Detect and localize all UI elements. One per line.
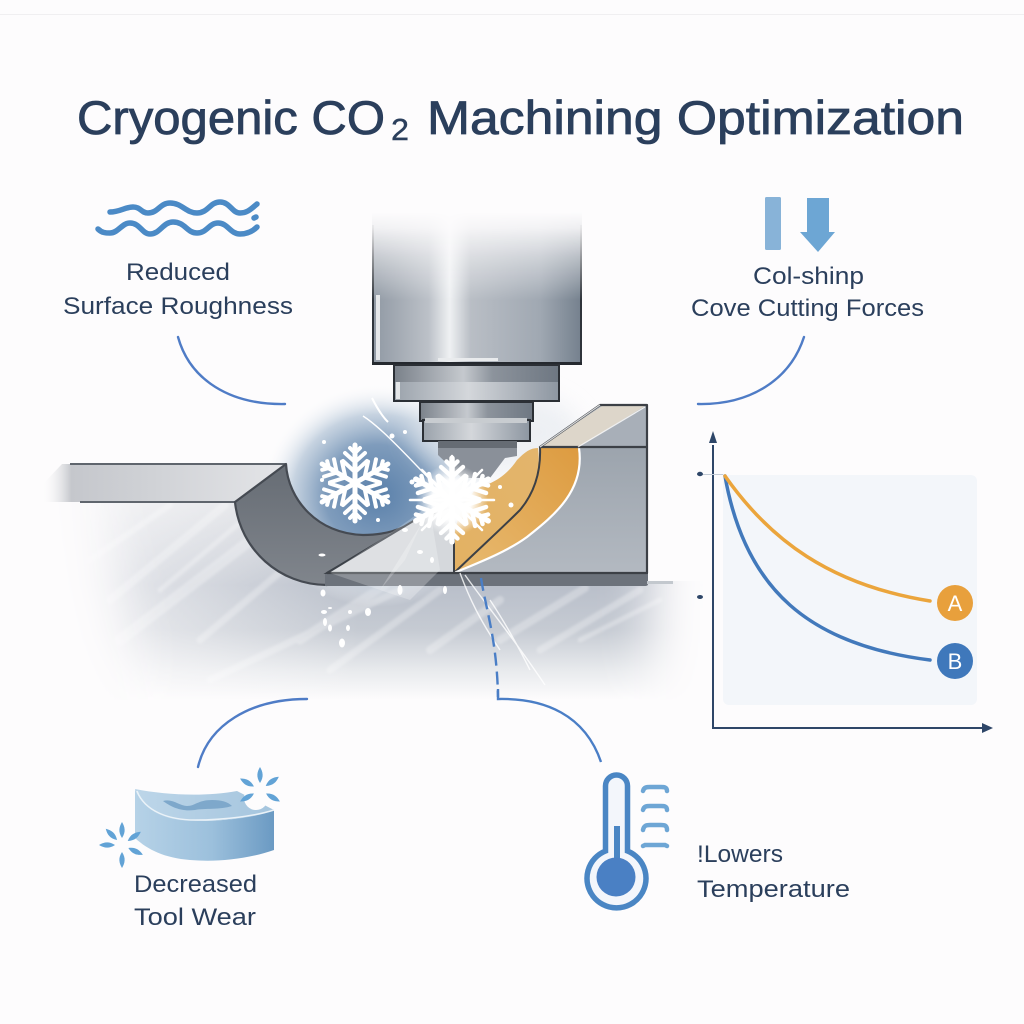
- workpiece ground shading: [105, 503, 678, 688]
- machining illustration: [40, 212, 740, 700]
- label: cutting forces: [691, 263, 924, 322]
- label: lowers temperature: [697, 841, 850, 903]
- snowflake burst: [409, 456, 495, 542]
- tool tip: [438, 441, 517, 478]
- title: Machining Optimization: [427, 91, 964, 144]
- spindle: [372, 212, 582, 478]
- label: cutting forces: Cove Cutting Forces: [691, 295, 924, 322]
- label: decreased tool wear: Decreased: [134, 871, 257, 898]
- marker A: A: [948, 591, 963, 616]
- label: cutting forces: Col-shinp: [753, 263, 864, 290]
- base bar: [325, 573, 648, 586]
- title: Cryogenic CO: [77, 91, 385, 144]
- icon: thermometer: [587, 775, 667, 908]
- diagonal streaks: [146, 528, 652, 662]
- axes: [697, 431, 993, 733]
- sparks and frost streaks: [318, 398, 545, 685]
- title: [77, 91, 964, 147]
- light wedge: [327, 500, 470, 573]
- icon: force arrows: [765, 197, 835, 252]
- connector: bottom left: [198, 699, 307, 767]
- label: reduced surface roughness: [63, 259, 293, 320]
- marker B: [937, 643, 973, 679]
- lower collar: [420, 402, 533, 421]
- title: 2: [391, 112, 409, 147]
- label: lowers temperature: !Lowers: [697, 841, 783, 868]
- connector: top left: [178, 337, 285, 404]
- curve B: [725, 476, 930, 660]
- cold haze: [260, 383, 496, 607]
- label: decreased tool wear: Tool Wear: [134, 904, 256, 931]
- icon: worn tool insert: [99, 767, 281, 868]
- tan facet: [540, 406, 645, 447]
- snowflake left: [316, 445, 394, 521]
- curve A: [725, 476, 930, 601]
- label: reduced surface roughness: Surface Roughness: [63, 293, 293, 320]
- label: decreased tool wear: [134, 871, 257, 931]
- connector: top right: [698, 337, 804, 404]
- label: lowers temperature: Temperature: [697, 876, 850, 903]
- panel: surface roughness: [63, 202, 293, 320]
- marker A: [937, 585, 973, 621]
- orange cut: [454, 448, 539, 573]
- panel: lowers temperature: [587, 775, 850, 908]
- marker B: B: [948, 649, 962, 674]
- panel: cutting forces: [691, 197, 924, 322]
- collar: [394, 365, 559, 401]
- panel: tool wear: [99, 767, 281, 931]
- chart: cooling curves: [697, 431, 993, 733]
- connector: bottom centre: [481, 578, 601, 762]
- label: reduced surface roughness: Reduced: [126, 259, 230, 286]
- right block: [454, 447, 647, 573]
- top strip: [42, 464, 286, 502]
- plot area: [723, 475, 977, 705]
- icon: waves: [98, 202, 257, 234]
- machined groove: [235, 464, 418, 585]
